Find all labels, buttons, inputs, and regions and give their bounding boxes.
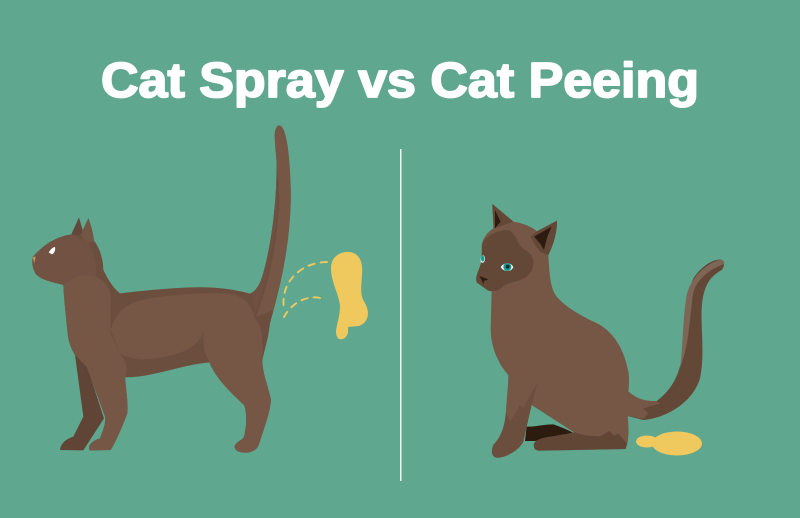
divider	[400, 149, 402, 481]
nose	[33, 256, 36, 263]
front leg shade	[492, 382, 537, 458]
shoulder and front leg	[63, 275, 128, 450]
eye	[49, 247, 55, 254]
nose	[479, 276, 488, 284]
near ear	[81, 218, 94, 243]
spray: yellow splash	[331, 252, 368, 339]
far ear	[492, 204, 513, 228]
tail	[623, 259, 724, 420]
eyes	[501, 263, 513, 271]
tail left tone	[252, 163, 277, 317]
head tone	[32, 234, 96, 285]
tail light tone	[256, 125, 291, 317]
illustration: spraying cat	[32, 125, 291, 453]
puddle	[636, 432, 702, 456]
face mask	[476, 230, 533, 291]
hind foot shade	[534, 431, 627, 451]
far front leg	[60, 355, 104, 450]
body silhouette	[32, 125, 291, 453]
title: Cat Spray vs Cat Peeing	[101, 54, 699, 108]
near ear	[531, 221, 557, 255]
far ear	[71, 217, 84, 235]
far paw	[525, 424, 575, 441]
torso highlight	[111, 293, 271, 453]
spray: dashed arcs	[283, 262, 327, 317]
body and head	[476, 204, 660, 458]
illustration: sitting cat	[476, 204, 724, 458]
tail highlight	[680, 259, 724, 368]
